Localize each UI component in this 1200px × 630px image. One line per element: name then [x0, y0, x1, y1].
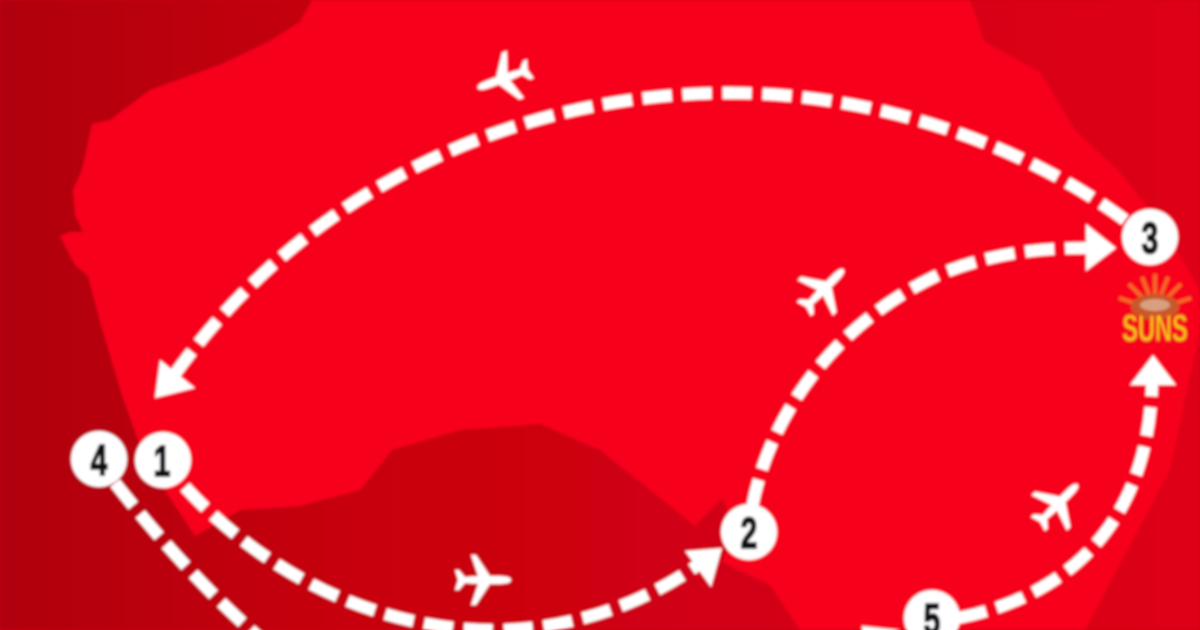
marker: stop 2	[721, 504, 777, 560]
logo: Suns: SUNS	[1122, 306, 1188, 349]
arrow: route 4 to 5	[115, 483, 900, 630]
marker: stop 1	[135, 432, 191, 488]
icon: plane top	[469, 45, 539, 111]
marker: stop 4	[71, 431, 127, 487]
icon: plane right	[786, 252, 861, 327]
marker: stop 4: 4	[91, 435, 107, 484]
arrow: route 3 to 1	[155, 93, 1125, 398]
marker: stop 3	[1122, 209, 1178, 265]
arrow: route 2 to 3	[752, 224, 1116, 508]
arrow: route 1 to 2	[185, 487, 722, 630]
marker: stop 5	[904, 590, 960, 630]
marker: stop 1: 1	[154, 436, 170, 485]
arrow: route 5 to 3	[958, 355, 1176, 618]
icon: plane bottom right	[1020, 467, 1095, 542]
marker: stop 2: 2	[741, 508, 757, 557]
icon: plane bottom centre	[455, 555, 511, 605]
logo: Suns	[1119, 274, 1191, 349]
marker: stop 3: 3	[1142, 213, 1158, 262]
